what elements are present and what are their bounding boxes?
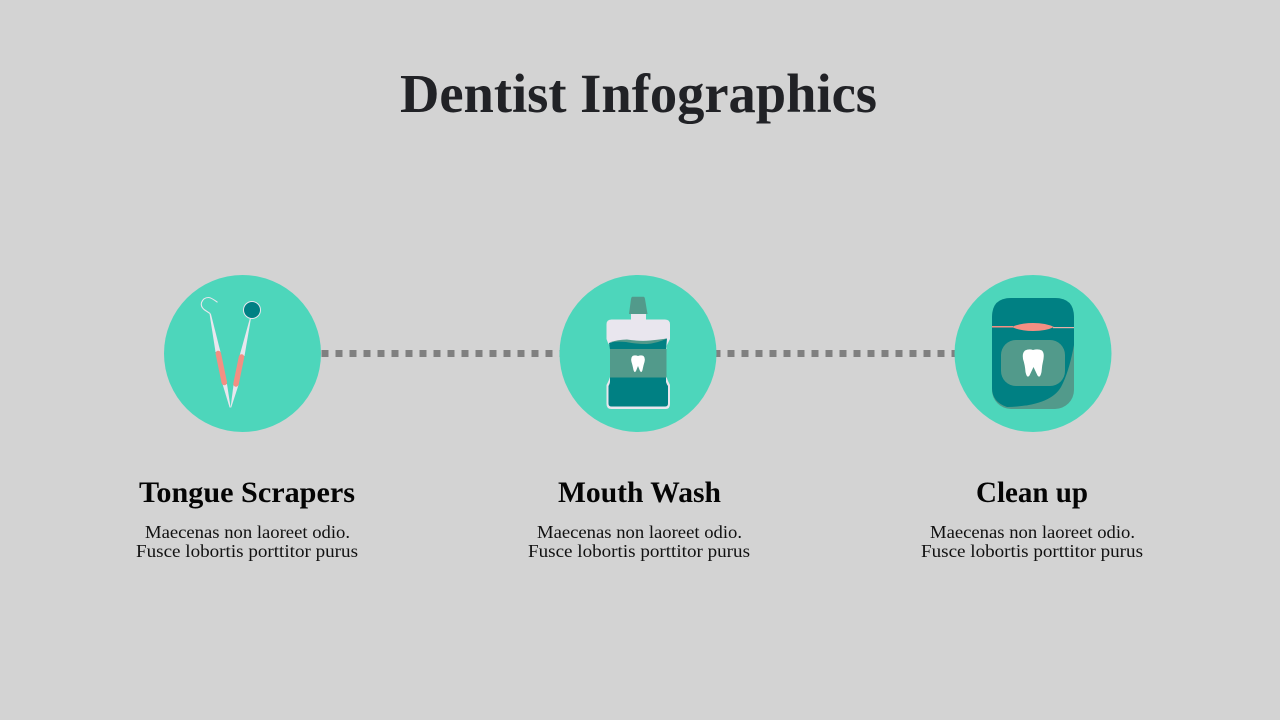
icon: dental tools bbox=[164, 275, 321, 432]
text block: Clean up description: Maecenas non laoreet odio. bbox=[930, 522, 1135, 542]
text block: Mouth Wash description bbox=[528, 522, 750, 561]
heading: Tongue Scrapers: Tongue Scrapers bbox=[139, 476, 355, 509]
text block: Tongue Scrapers description: Maecenas non laoreet odio. bbox=[145, 522, 350, 542]
text block: Tongue Scrapers description: Fusce lobortis porttitor purus bbox=[136, 541, 358, 561]
text block: Clean up description: Fusce lobortis porttitor purus bbox=[921, 541, 1143, 561]
connector: second dotted line bbox=[714, 350, 958, 357]
text block: Mouth Wash description: Fusce lobortis porttitor purus bbox=[528, 541, 750, 561]
text block: Mouth Wash description: Maecenas non laoreet odio. bbox=[537, 522, 742, 542]
text block: Clean up description bbox=[921, 522, 1143, 561]
heading: Clean up: Clean up bbox=[976, 476, 1088, 509]
heading: Mouth Wash: Mouth Wash bbox=[558, 476, 721, 509]
icon: dental floss box bbox=[954, 275, 1112, 432]
text block: Tongue Scrapers description bbox=[136, 522, 358, 561]
title: Dentist Infographics bbox=[400, 63, 877, 124]
connector: first dotted line bbox=[322, 350, 566, 357]
icon: mouthwash bottle bbox=[560, 275, 716, 432]
